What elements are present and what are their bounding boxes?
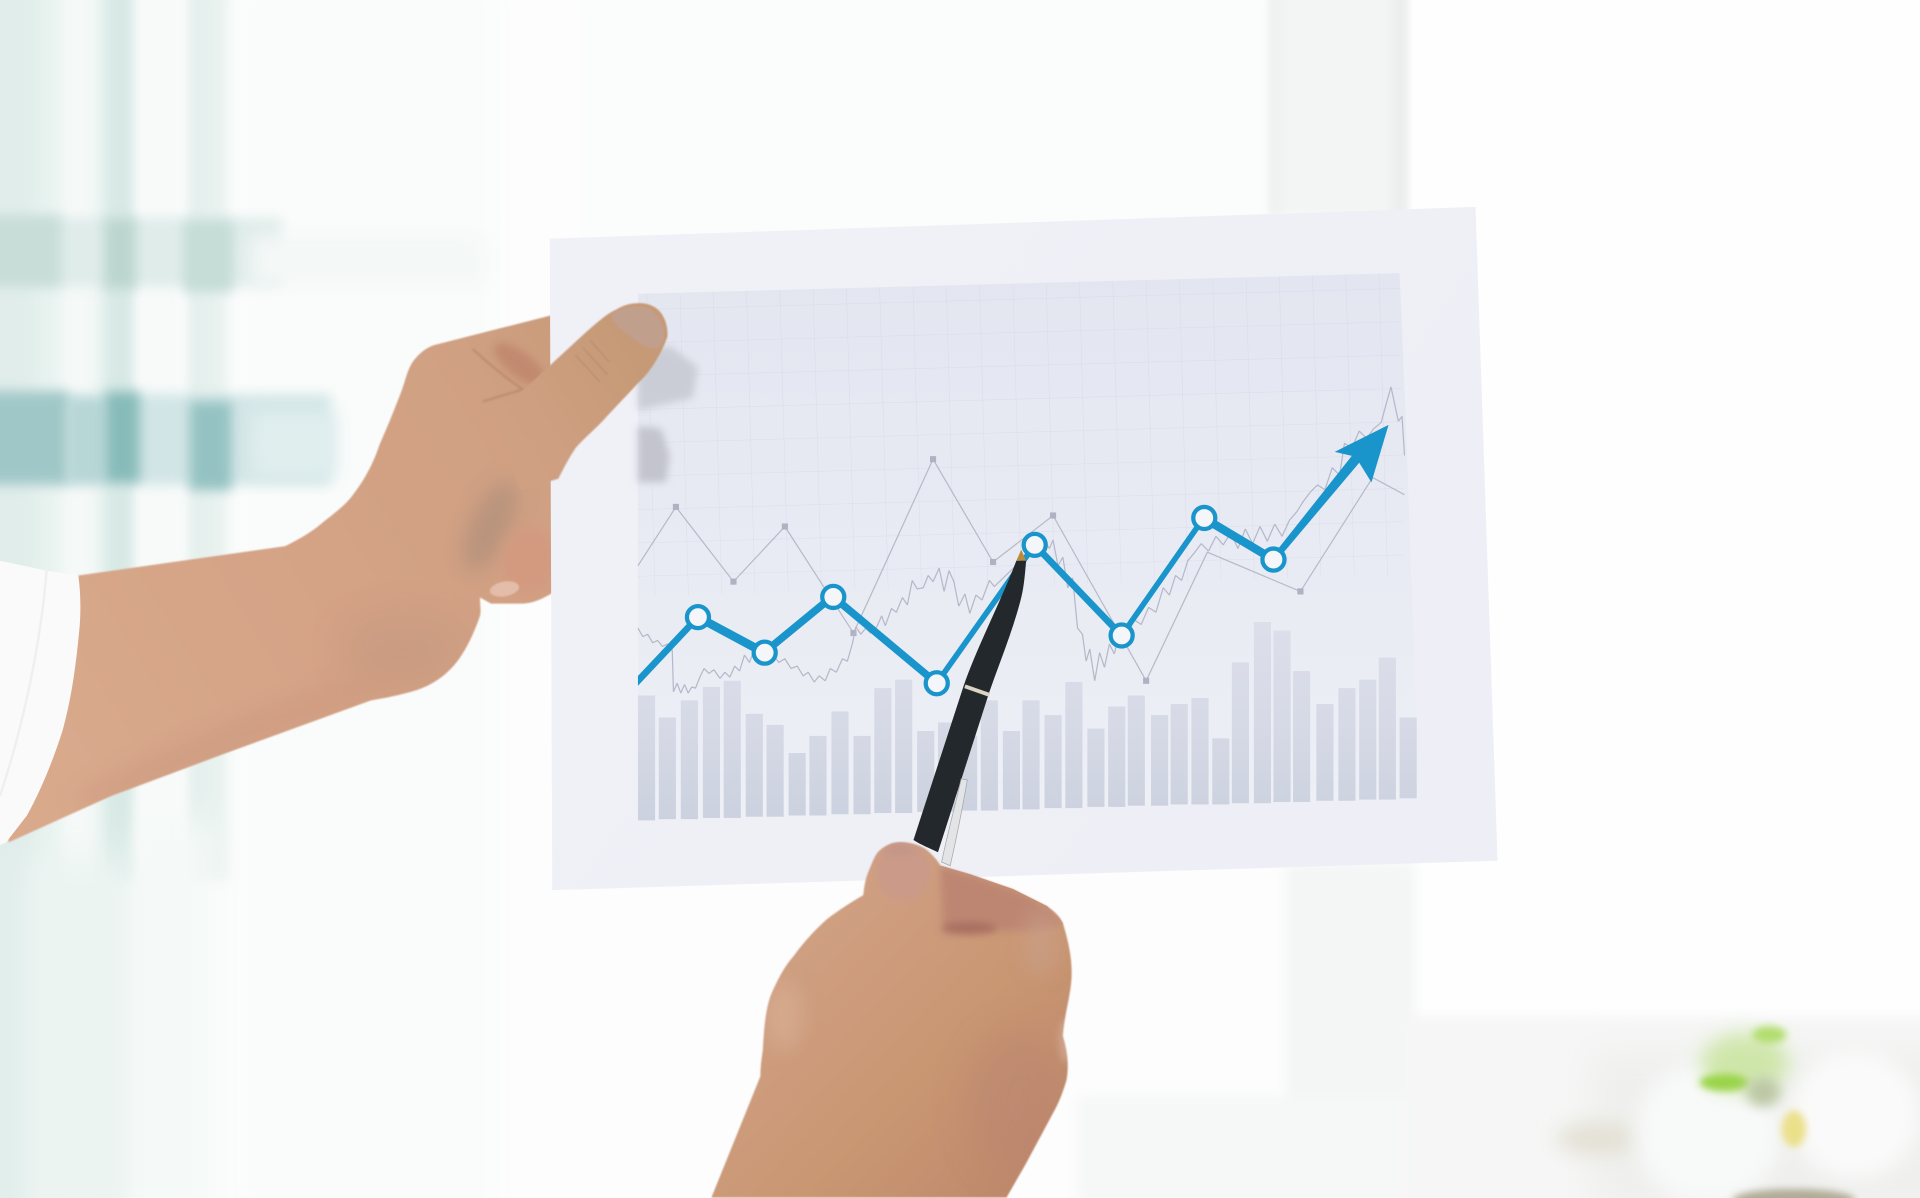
background volume bars <box>638 622 1417 820</box>
left arm and palm behind the paper <box>8 314 552 843</box>
pen clip <box>942 779 967 866</box>
jagged grey price line <box>638 387 1404 693</box>
background: window frame <box>1078 0 1920 1198</box>
thumb shadows on the chart <box>638 347 698 482</box>
lower hand <box>698 833 1090 1198</box>
thumb over the paper <box>496 303 668 490</box>
thin grey comparison line with square markers <box>638 456 1404 684</box>
background: blurred flowers on the sill <box>1556 1026 1920 1198</box>
sheet of paper <box>550 207 1498 890</box>
background: blurred teal plaid curtain <box>0 0 502 1198</box>
blue rising line chart with arrow <box>638 425 1389 688</box>
shirt sleeve <box>0 561 80 845</box>
lower hand holding the pen, back layer <box>940 866 1063 967</box>
pen <box>913 550 1026 866</box>
printed chart area <box>638 273 1419 820</box>
data point markers <box>687 507 1284 694</box>
icon: blue arrowhead <box>1335 425 1389 482</box>
